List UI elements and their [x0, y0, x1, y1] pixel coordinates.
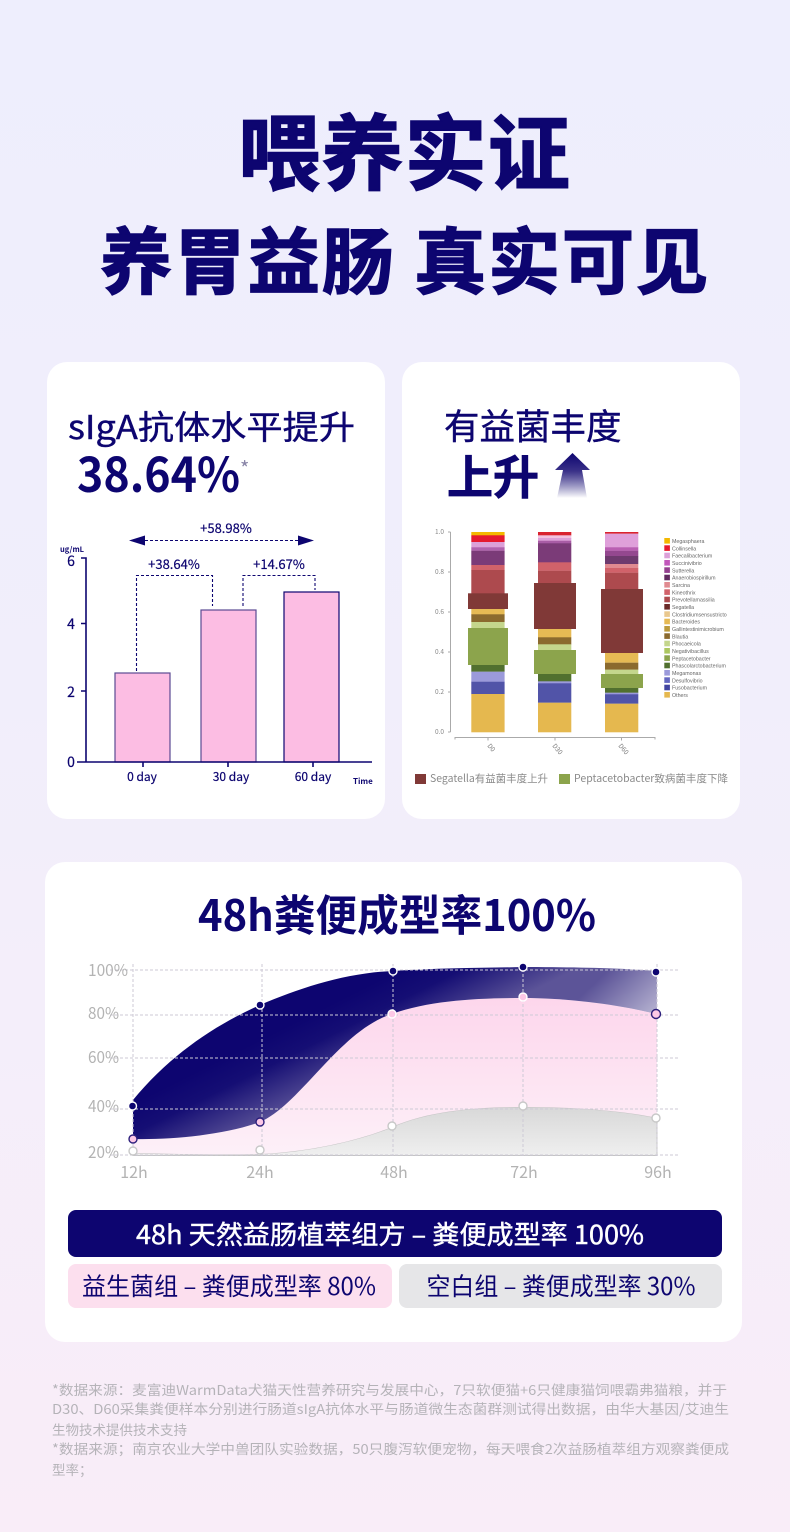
highlight legend: Segatella有益菌丰度上升	[430, 771, 548, 786]
bar: blank group	[399, 1264, 722, 1308]
footnotes: D30、D60采集粪便样本分别进行肠道sIgA抗体水平与肠道微生态菌群测试得出数据，由华大基因/艾迪生	[52, 1398, 729, 1418]
species legend: Gallintestinimicrobium	[672, 627, 724, 633]
area: pink group	[133, 998, 657, 1154]
bar chart: sIgA levels: 60 day	[295, 768, 332, 785]
highlight legend	[415, 771, 728, 786]
footnotes: *数据来源：麦富迪WarmData犬猫天性营养研究与发展中心，7只软便猫+6只健康猫饲喂霸弗猫粮，并于	[52, 1379, 727, 1399]
area chart: 12h	[120, 1159, 148, 1183]
subheading: rising: 上升	[447, 442, 539, 508]
title: 养胃益肠 真实可见	[100, 204, 708, 309]
species legend: Phascolarctobacterium	[672, 664, 726, 670]
species legend: Others	[672, 693, 688, 699]
stacked bar chart	[435, 526, 727, 757]
bar: 48h plant formula: 48h 天然益肠植萃组方 – 粪便成型率 100%	[136, 1215, 644, 1252]
bar chart: sIgA levels: +14.67%	[253, 554, 305, 573]
stacked bar chart: 1.0	[435, 526, 444, 536]
heading: bacteria abundance: 有益菌丰度	[444, 399, 622, 450]
species legend: Sutterella	[672, 568, 694, 574]
species legend: Blautia	[672, 634, 688, 640]
area chart	[88, 957, 680, 1183]
species legend: Megasphaera	[672, 539, 704, 545]
area chart: 80%	[88, 1000, 119, 1024]
area chart: 72h	[510, 1159, 538, 1183]
heading: sIgA: sIgA抗体水平提升	[68, 401, 355, 449]
species legend: Bacteroides	[672, 620, 700, 626]
stacked bar chart: D30	[550, 741, 566, 757]
bar chart: sIgA levels: 2	[67, 682, 75, 702]
species legend: Succinivibrio	[672, 561, 702, 567]
bar: 48h plant formula	[68, 1210, 722, 1257]
value: 38.64%: *	[240, 453, 249, 482]
area chart: 48h	[380, 1159, 408, 1183]
bar chart: sIgA levels: 0 day	[127, 768, 158, 785]
stacked bar chart: 0.8	[435, 566, 444, 576]
bar chart: sIgA levels: 30 day	[213, 768, 250, 785]
bar chart: sIgA levels	[60, 518, 373, 787]
D60	[601, 532, 643, 732]
value: 38.64%: 38.64%	[77, 436, 240, 506]
area chart: 60%	[88, 1044, 119, 1068]
area: navy group	[133, 967, 657, 1139]
footnotes: *数据来源；南京农业大学中兽团队实验数据，50只腹泻软便宠物，每天喂食2次益肠植萃组方观察粪便成	[52, 1438, 729, 1458]
icon: up arrow	[555, 453, 590, 498]
panel: sIgA antibody	[47, 362, 385, 819]
D30	[534, 532, 576, 732]
species legend: Segatella	[672, 605, 694, 611]
footnotes	[52, 1379, 729, 1479]
bar chart: sIgA levels: +38.64%	[148, 554, 200, 573]
bar chart: sIgA levels: ug/mL	[60, 544, 85, 555]
species legend: Fusobacterium	[672, 686, 708, 692]
area chart: 40%	[88, 1093, 119, 1117]
area chart: 24h	[246, 1159, 274, 1183]
bar: probiotic group: 益生菌组 – 粪便成型率 80%	[82, 1268, 376, 1303]
species legend: Anaerobiospirillum	[672, 576, 716, 582]
data points	[128, 963, 660, 1155]
stacked bar chart: 0.6	[435, 606, 444, 616]
title: 喂养实证	[238, 88, 570, 207]
heading: 48h rate: 48h粪便成型率100%	[198, 882, 596, 944]
species legend: Clostridiumsensustricto	[672, 612, 727, 618]
species legend: Kineothrix	[672, 590, 696, 596]
species legend: Negativibacillus	[672, 649, 709, 655]
area chart: 96h	[644, 1159, 672, 1183]
panel: stool formation rate	[45, 862, 742, 1342]
bar: blank group: 空白组 – 粪便成型率 30%	[426, 1268, 696, 1303]
area chart: 20%	[88, 1139, 119, 1163]
species legend: Collinsella	[672, 546, 696, 552]
title	[100, 88, 708, 309]
bar chart: sIgA levels: Time	[353, 776, 373, 787]
stacked bar chart: 0.4	[435, 646, 444, 656]
panel: beneficial bacteria	[402, 362, 740, 819]
species legend: Peptacetobacter	[672, 656, 711, 662]
stacked bar chart: 0.2	[435, 686, 444, 696]
bar chart: sIgA levels: 0	[67, 752, 75, 772]
highlight legend: Peptacetobacter致病菌丰度下降	[574, 771, 728, 786]
footnotes: 生物技术提供技术支持	[52, 1419, 187, 1439]
species legend: Prevotellamassilia	[672, 598, 715, 604]
species legend: Faecalibacterium	[672, 554, 713, 560]
species legend: Megamonas	[672, 671, 701, 677]
stacked bar chart: 0.0	[435, 726, 444, 736]
area: gray group	[133, 1107, 657, 1156]
species legend: Sarcina	[672, 583, 690, 589]
D0	[468, 532, 508, 732]
species legend	[664, 538, 727, 699]
species legend: Phocaeicola	[672, 642, 701, 648]
bar chart: sIgA levels: 4	[67, 614, 75, 634]
species legend: Desulfovibrio	[672, 678, 703, 684]
stacked bar chart: D0	[485, 741, 499, 754]
bar chart: sIgA levels: +58.98%	[200, 518, 252, 537]
stacked bar chart: D60	[616, 741, 632, 757]
footnotes: 型率；	[52, 1459, 92, 1479]
bar chart: sIgA levels: 6	[67, 551, 75, 571]
area chart: 100%	[88, 957, 128, 981]
